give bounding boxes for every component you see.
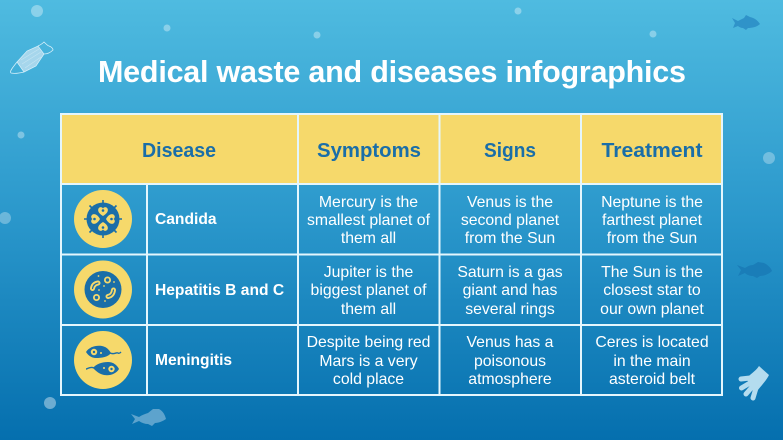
- text: Meningitis signs: atmosphere: [468, 371, 552, 388]
- text: Hepatitis treatment: our own planet: [600, 301, 704, 318]
- icon: glove: [741, 366, 769, 398]
- text: Meningitis treatment: asteroid belt: [609, 371, 696, 388]
- text: Hepatitis symptoms: them all: [341, 301, 396, 318]
- text: Meningitis symptoms: Mars is a very: [319, 353, 418, 370]
- table: [61, 114, 722, 395]
- icon: fish bottom left: [131, 409, 166, 426]
- text: Hepatitis treatment: closest star to: [603, 282, 701, 299]
- text: Candida symptoms: smallest planet of: [307, 212, 431, 229]
- icon: fish right: [737, 262, 772, 278]
- label: Meningitis: Meningitis: [155, 352, 232, 369]
- text: Hepatitis symptoms: biggest planet of: [311, 282, 427, 299]
- text: Hepatitis treatment: The Sun is the: [601, 264, 703, 281]
- text: Hepatitis symptoms: Jupiter is the: [324, 264, 413, 281]
- icon: fish top right: [732, 15, 760, 30]
- text: Candida signs: Venus is the: [467, 194, 553, 211]
- text: Meningitis signs: Venus has a: [467, 334, 554, 351]
- text: Candida signs: from the Sun: [465, 230, 555, 247]
- text: Meningitis treatment: Ceres is located: [595, 334, 709, 351]
- text: Meningitis symptoms: cold place: [333, 371, 404, 388]
- text: Hepatitis signs: Saturn is a gas: [457, 264, 563, 281]
- table grid: [61, 114, 722, 395]
- text: Hepatitis signs: several rings: [465, 301, 555, 318]
- text: Meningitis treatment: in the main: [613, 353, 691, 370]
- text: Candida treatment: Neptune is the: [601, 194, 703, 211]
- text: Hepatitis signs: giant and has: [463, 282, 558, 299]
- icon: candida: [74, 190, 132, 248]
- text: Candida signs: second planet: [461, 212, 560, 229]
- heading: Symptoms: Symptoms: [317, 139, 421, 162]
- text: Meningitis signs: poisonous: [474, 353, 546, 370]
- label: Candida: Candida: [155, 211, 217, 228]
- icon: hepatitis: [74, 260, 132, 318]
- label: Hepatitis B and C: Hepatitis B and C: [155, 282, 284, 299]
- text: Meningitis symptoms: Despite being red: [307, 334, 430, 351]
- heading: Signs: Signs: [484, 139, 536, 162]
- heading: Disease: Disease: [142, 139, 216, 162]
- panel: header row: [61, 114, 722, 184]
- heading: Treatment: Treatment: [602, 139, 703, 162]
- text: Candida treatment: from the Sun: [607, 230, 697, 247]
- text: Candida treatment: farthest planet: [602, 212, 703, 229]
- text: Candida symptoms: Mercury is the: [319, 194, 418, 211]
- text: Candida symptoms: them all: [341, 230, 396, 247]
- icon: meningitis: [74, 331, 132, 389]
- title: Medical waste and diseases infographics: [98, 55, 686, 89]
- icon: face mask: [10, 42, 53, 73]
